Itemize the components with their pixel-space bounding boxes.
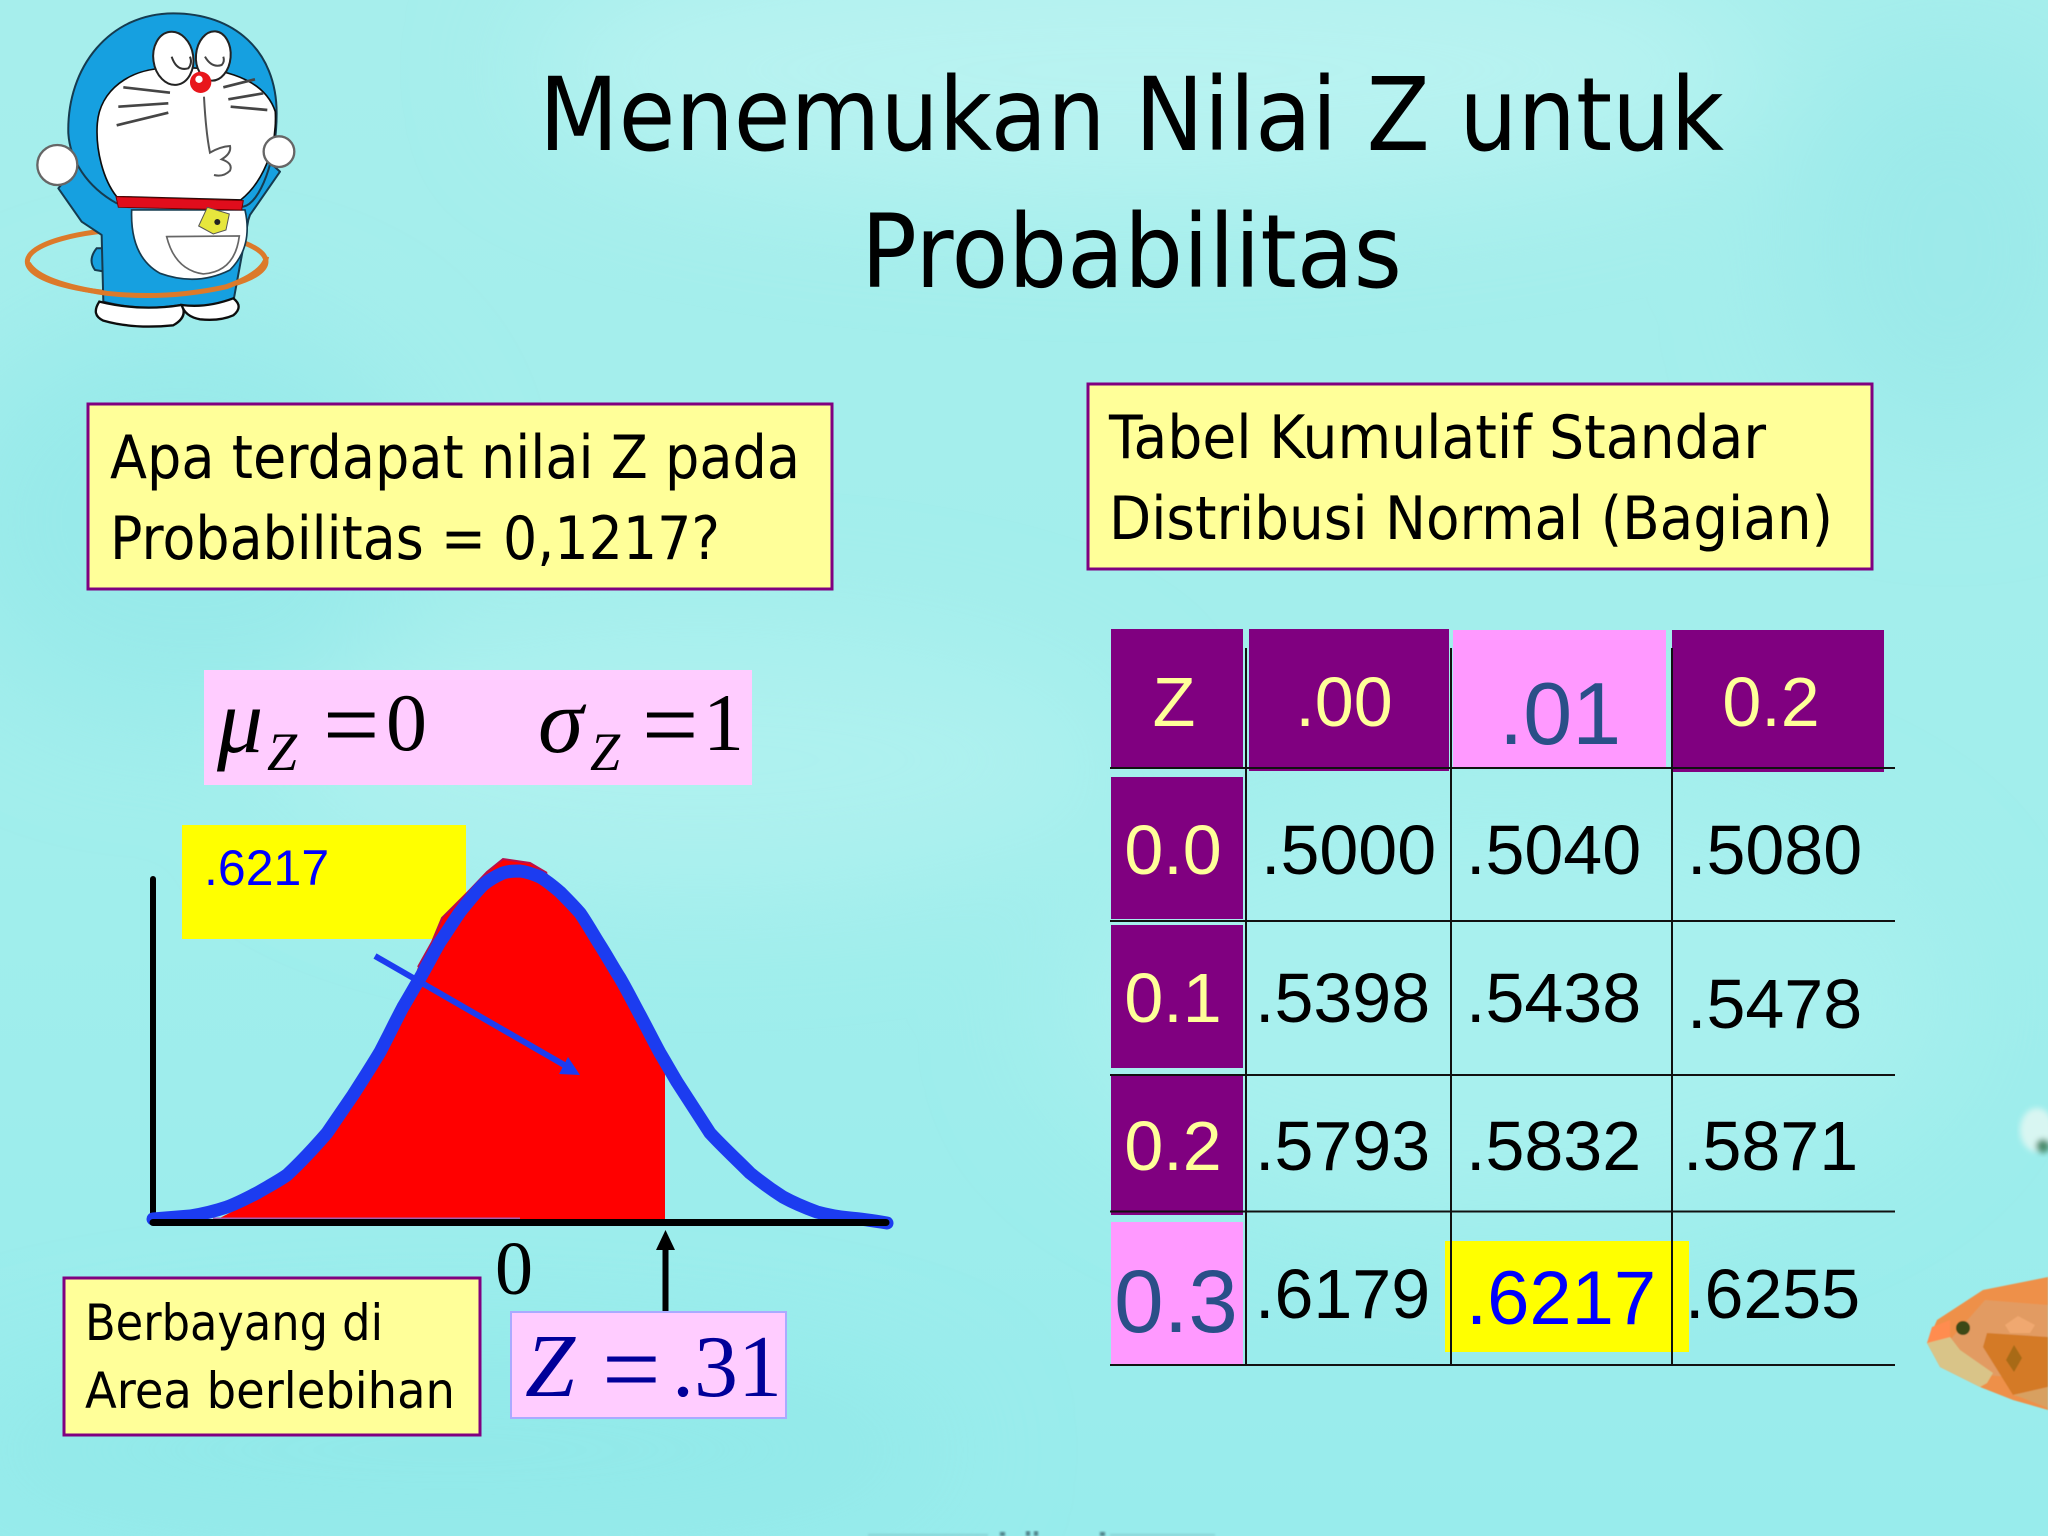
formula: mean and standard deviation: 0	[386, 677, 427, 768]
title: Probabilitas	[861, 193, 1402, 312]
question box: Apa terdapat nilai Z pada	[110, 423, 800, 493]
row headings: 0.2	[1124, 1107, 1222, 1185]
row headings: 0.0	[1124, 811, 1222, 889]
table heading box: Tabel Kumulatif Standar	[1108, 403, 1766, 473]
table values: .5793	[1255, 1107, 1430, 1185]
title	[539, 56, 1724, 312]
title: Menemukan Nilai Z untuk	[539, 56, 1724, 175]
arrow: area pointer	[375, 956, 580, 1075]
column headings: 0.2	[1722, 663, 1820, 741]
table values: .5000	[1261, 811, 1436, 889]
table heading box	[1088, 384, 1872, 569]
zero label: 0	[495, 1227, 533, 1311]
table values: .5832	[1466, 1107, 1641, 1185]
row headings	[1114, 811, 1238, 1351]
table: cumulative normal distribution	[1110, 629, 1895, 1365]
column headings: .01	[1499, 664, 1621, 763]
formula: mean and standard deviation	[204, 669, 752, 785]
table values: .5398	[1255, 959, 1430, 1037]
formula: mean and standard deviation: Z	[267, 722, 298, 782]
formula: mean and standard deviation: =	[323, 669, 379, 780]
column headings: .00	[1295, 663, 1393, 741]
shaded area under curve	[212, 859, 665, 1222]
header cells	[1111, 629, 1884, 772]
question box: Probabilitas = 0,1217?	[110, 504, 720, 574]
z value box: .31	[672, 1319, 782, 1416]
table values	[1255, 811, 1862, 1341]
table values: .5478	[1687, 965, 1862, 1043]
z value box: Z	[525, 1317, 576, 1416]
table values: .5871	[1683, 1107, 1858, 1185]
table values: .6255	[1685, 1255, 1860, 1333]
icon: Doraemon with hoop	[27, 13, 294, 327]
table values: .6217	[1466, 1256, 1656, 1341]
area value label	[182, 825, 466, 939]
formula: mean and standard deviation: Z	[590, 722, 621, 782]
question box	[88, 404, 832, 589]
note box	[64, 1278, 480, 1435]
decoration: orange fish at right edge	[1927, 1277, 2048, 1410]
table values: .5040	[1466, 811, 1641, 889]
note box: Berbayang di	[85, 1294, 383, 1352]
chart: normal curve	[153, 859, 887, 1313]
z value box: =	[602, 1312, 661, 1427]
arrow: z position	[656, 1230, 675, 1313]
column headings	[1153, 663, 1820, 763]
bell curve line	[153, 871, 887, 1223]
decoration: bubble at right edge	[2020, 1108, 2048, 1153]
table heading box: Distribusi Normal (Bagian)	[1109, 484, 1833, 554]
footer url cut off at the bottom edge	[868, 1531, 1215, 1536]
note box: Area berlebihan	[85, 1362, 455, 1420]
row header cells	[1111, 777, 1243, 1364]
highlighted cell	[1445, 1241, 1689, 1352]
formula: mean and standard deviation: 1	[703, 677, 744, 768]
row headings: 0.3	[1114, 1251, 1238, 1351]
y axis	[150, 879, 156, 1222]
x axis	[153, 1219, 886, 1226]
row headings: 0.1	[1124, 959, 1222, 1037]
table values: .5080	[1687, 811, 1862, 889]
z value box	[511, 1312, 786, 1427]
table values: .5438	[1466, 959, 1641, 1037]
formula: mean and standard deviation: μ	[216, 670, 263, 772]
formula: mean and standard deviation: =	[642, 669, 698, 780]
column headings: Z	[1153, 663, 1195, 741]
table values: .6179	[1255, 1255, 1430, 1333]
area value label: .6217	[204, 840, 329, 896]
formula: mean and standard deviation: σ	[538, 670, 587, 772]
